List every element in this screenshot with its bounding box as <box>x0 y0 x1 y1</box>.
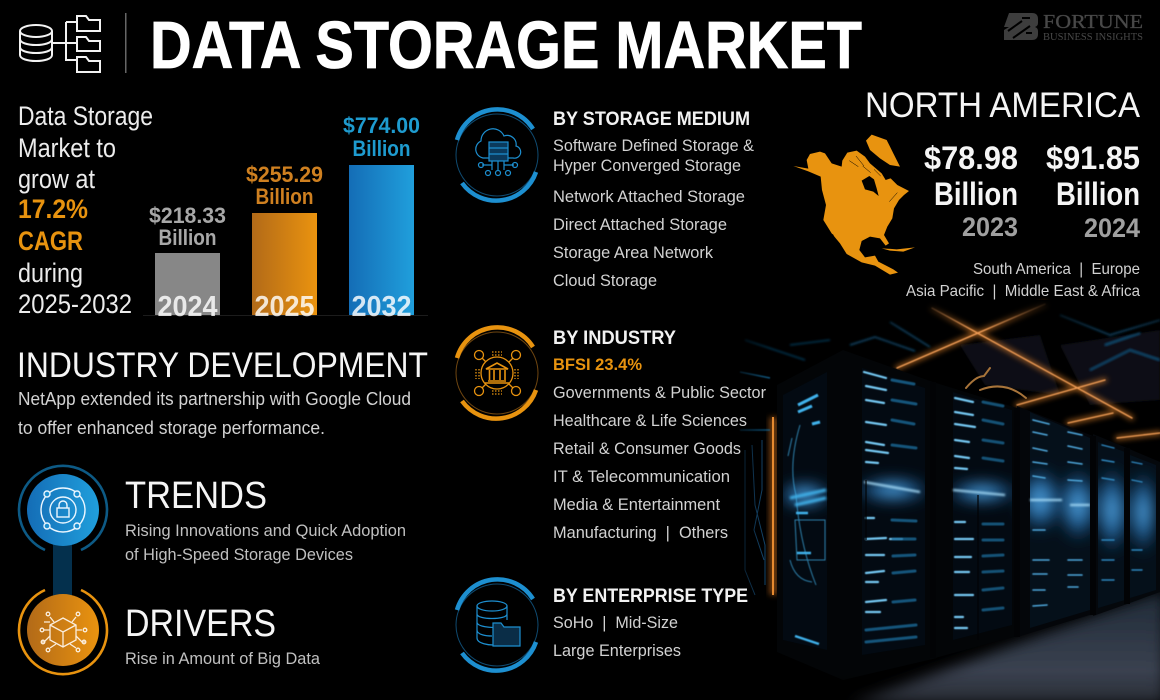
stat: north america 2023: 2023 <box>962 212 1018 242</box>
stat: north america 2023 <box>924 140 1018 242</box>
rack LED rows <box>864 372 1142 642</box>
heading: north america: NORTH AMERICA <box>865 86 1141 125</box>
logo: Fortune Business Insights: BUSINESS INSIGHTS <box>1043 32 1143 43</box>
bar 2025: $255.29 <box>246 162 323 187</box>
stat: north america 2024: 2024 <box>1084 213 1140 243</box>
rack screen glow <box>775 462 1159 558</box>
rack screens <box>783 368 1156 655</box>
rack side panel circuit lights <box>788 395 826 644</box>
bar 2024: Billion <box>158 225 216 250</box>
bar 2024: $218.33 <box>149 203 226 228</box>
list: storage medium: Cloud Storage <box>553 271 657 290</box>
bar 2025: Billion <box>256 184 314 209</box>
stat: north america 2024: Billion <box>1056 176 1140 212</box>
text block: drivers: Rise in Amount of Big Data <box>125 649 321 668</box>
bar 2032: 2032 <box>352 291 412 323</box>
title: DATA STORAGE MARKET <box>150 8 862 83</box>
list: storage medium <box>553 136 755 290</box>
heading: trends: TRENDS <box>125 475 267 517</box>
text block: market growth summary: Market to <box>18 133 116 163</box>
orange ceiling light beams <box>897 304 1160 438</box>
rack screen band highlight <box>864 482 1090 505</box>
text block: industry development: to offer enhanced storage performance. <box>18 418 325 438</box>
list: enterprise type: Large Enterprises <box>553 641 681 660</box>
list: storage medium: Hyper Converged Storage <box>553 156 741 175</box>
list: industry: Governments & Public Sector <box>553 383 766 402</box>
heading: drivers: DRIVERS <box>125 603 276 645</box>
text block: industry development: NetApp extended its partnership with Google Cloud <box>18 389 411 409</box>
list: enterprise type <box>553 613 681 660</box>
list: storage medium: Storage Area Network <box>553 243 713 262</box>
floor <box>850 590 1160 700</box>
list: industry: IT & Telecommunication <box>553 467 730 486</box>
bar 2024: 2024 <box>158 291 218 323</box>
icon: bank industry <box>456 327 538 419</box>
header icon: database and folder tree <box>20 16 100 72</box>
bar 2025 <box>246 162 323 323</box>
text block: industry development <box>18 389 411 438</box>
text block: trends: Rising Innovations and Quick Adoption <box>125 521 406 540</box>
stat: north america 2024: $91.85 <box>1046 140 1140 176</box>
stat: north america 2023: Billion <box>934 176 1018 212</box>
ceiling ducts <box>745 315 1160 405</box>
heading: by industry: BY INDUSTRY <box>553 328 676 349</box>
list: industry: Manufacturing | Others <box>553 523 728 542</box>
list: industry: BFSI 23.4% <box>553 355 642 374</box>
bar chart: market size <box>143 113 428 323</box>
text block: market growth summary: Data Storage <box>18 101 153 131</box>
photo edge fades <box>725 300 770 700</box>
left circuit wall with orange edge <box>740 372 778 595</box>
bar 2032 <box>343 113 420 323</box>
icon: cloud storage medium <box>456 109 538 201</box>
stat: north america 2024 <box>1046 140 1140 243</box>
text block: other regions <box>906 261 1140 300</box>
heading: by storage medium: BY STORAGE MEDIUM <box>553 109 750 130</box>
bar 2024 <box>149 203 226 323</box>
connector between trends and drivers <box>53 540 72 605</box>
text block: trends: of High-Speed Storage Devices <box>125 545 353 564</box>
list: industry <box>553 355 766 542</box>
list: storage medium: Software Defined Storage & <box>553 136 755 155</box>
logo: Fortune Business Insights <box>1004 11 1143 43</box>
list: storage medium: Network Attached Storage <box>553 187 745 206</box>
logo: Fortune Business Insights: FORTUNE <box>1043 11 1143 33</box>
list: storage medium: Direct Attached Storage <box>553 215 727 234</box>
heading: industry development: INDUSTRY DEVELOPMENT <box>17 346 428 385</box>
rack bodies <box>777 350 937 680</box>
stat: north america 2023: $78.98 <box>924 140 1018 176</box>
text block: market growth summary: CAGR <box>18 226 83 256</box>
bar 2025: 2025 <box>254 291 314 323</box>
photo: server racks in a data centre <box>725 300 1160 700</box>
text block: market growth summary: grow at <box>18 164 95 194</box>
list: industry: Media & Entertainment <box>553 495 720 514</box>
list: enterprise type: SoHo | Mid-Size <box>553 613 678 632</box>
bar 2032: Billion <box>352 136 410 161</box>
text block: market growth summary <box>18 101 153 319</box>
rack dividers <box>933 382 1127 658</box>
map: north america <box>793 135 915 275</box>
text block: trends <box>125 521 406 564</box>
list: industry: Healthcare & Life Sciences <box>553 411 747 430</box>
text block: market growth summary: 17.2% <box>18 194 88 224</box>
header divider <box>125 13 126 73</box>
list: industry: Retail & Consumer Goods <box>553 439 741 458</box>
icon: drivers circle with cube <box>19 590 107 674</box>
text block: other regions: South America | Europe <box>973 261 1140 278</box>
heading: by enterprise type: BY ENTERPRISE TYPE <box>553 586 748 607</box>
text block: other regions: Asia Pacific | Middle East & Africa <box>906 283 1140 300</box>
bar 2032: $774.00 <box>343 113 420 138</box>
text block: market growth summary: during <box>18 258 83 288</box>
icon: trends circle with lock <box>19 466 107 550</box>
text block: market growth summary: 2025-2032 <box>18 289 132 319</box>
icon: database and folder enterprise <box>456 579 538 671</box>
